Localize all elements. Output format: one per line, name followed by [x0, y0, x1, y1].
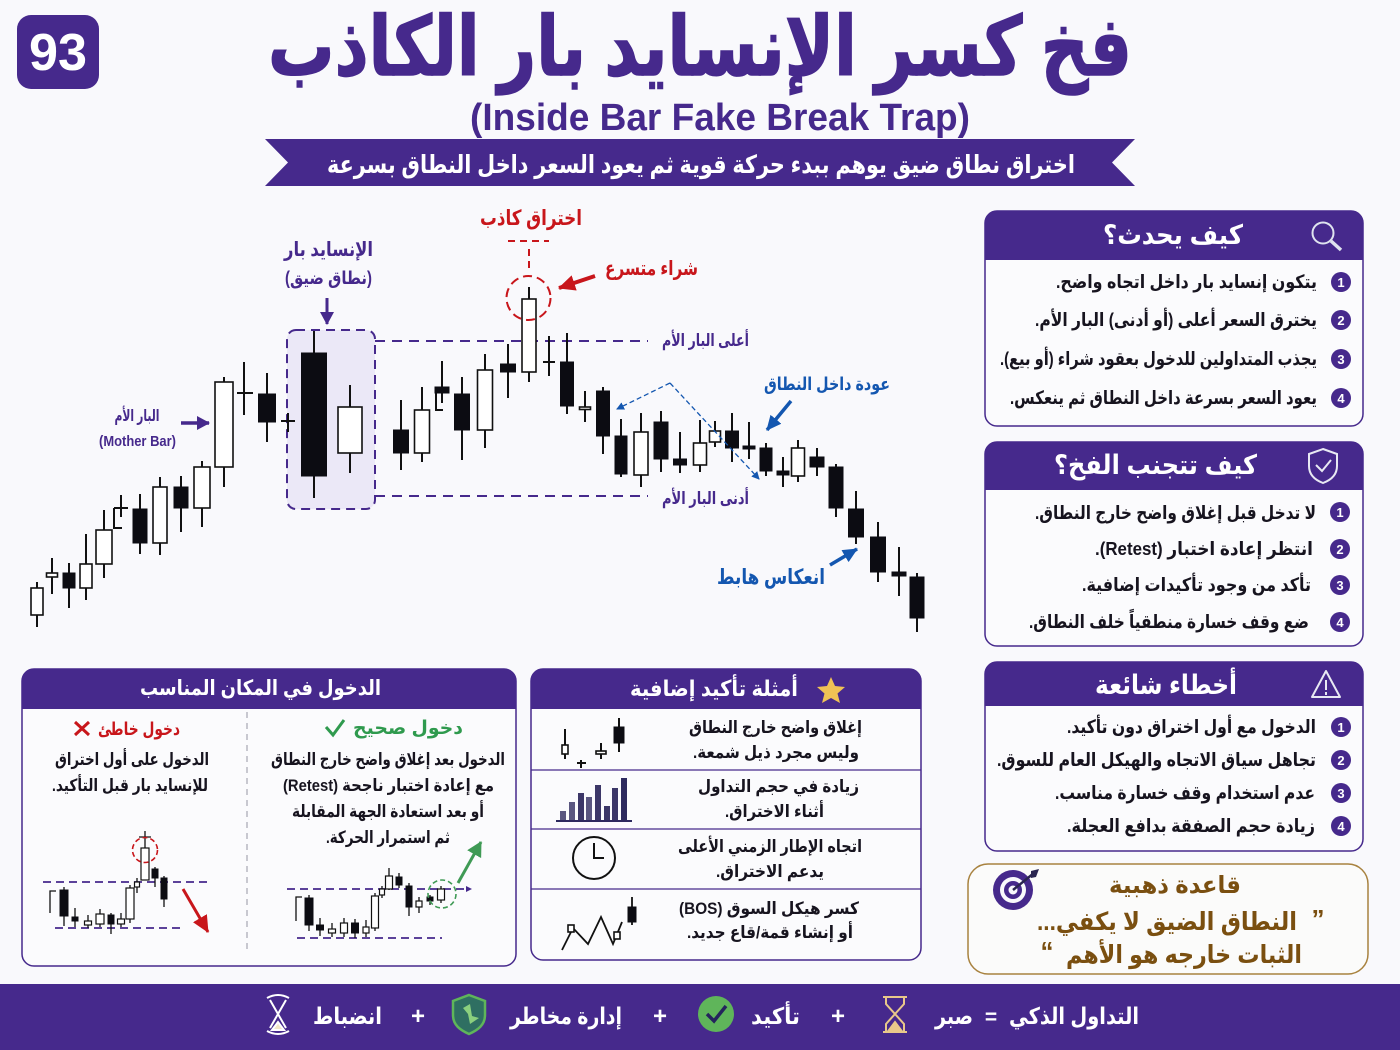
correct entry column: دخول صحيح: [353, 718, 463, 739]
mother bar high and low lines: [375, 341, 648, 496]
label: bearish reversal: انعكاس هابط: [717, 566, 825, 589]
icon: gold hourglass: [883, 997, 907, 1032]
panel: how to avoid the trap: [985, 442, 1363, 646]
row: higher timeframe trend: اتجاه الإطار الزمني الأعلى: [678, 836, 862, 857]
arrow: back inside range: [767, 401, 791, 430]
icon: star: [817, 677, 845, 703]
formula text: انضباط: [313, 1003, 382, 1029]
candle wicks: [37, 287, 917, 632]
heading: أمثلة تأكيد إضافية: [630, 673, 798, 702]
row: clear close outside range: [562, 718, 862, 768]
label: inside bar: (نطاق ضيق): [285, 268, 372, 289]
arrow: to inside bar: [326, 298, 328, 324]
formula text: صبر: [934, 1003, 973, 1030]
subtitle: (Inside Bar Fake Break Trap): [470, 97, 970, 139]
rule quote: “: [1040, 936, 1054, 966]
row: increased volume: أثناء الاختراق.: [725, 800, 824, 822]
list: ضع وقف خسارة منطقياً خلف النطاق.: [1029, 608, 1309, 633]
icon: target: [993, 869, 1039, 910]
list: [997, 715, 1351, 837]
hollow candles: [31, 299, 804, 615]
heading: كيف يحدث؟: [1103, 220, 1243, 250]
rule quote: الثبات خارجه هو الأهم: [1066, 939, 1302, 970]
list: 1: [1337, 720, 1345, 735]
arrow: bearish reversal: [830, 549, 857, 565]
wrong entry column: الدخول على أول اختراق: [55, 748, 209, 770]
list: انتظر إعادة اختبار (Retest).: [1095, 538, 1313, 560]
formula text: +: [411, 1003, 425, 1030]
icon: green shield: [453, 995, 485, 1034]
formula text: التداول الذكي: [1009, 1003, 1139, 1030]
heading: كيف تتجنب الفخ؟: [1054, 450, 1257, 481]
correct entry column: الدخول بعد إغلاق واضح خارج النطاق: [271, 750, 505, 770]
list: [1029, 502, 1350, 633]
label: mother bar high: أعلى البار الأم: [662, 329, 749, 350]
wrong entry column: دخول خاطئ: [98, 719, 180, 740]
heading: الدخول في المكان المناسب: [140, 677, 381, 700]
label: premature buying: شراء متسرع: [605, 258, 698, 280]
formula text: تأكيد: [751, 1000, 800, 1029]
formula text: [313, 1000, 1139, 1030]
row: break of structure: أو إنشاء قمة/قاع جديد.: [687, 921, 853, 943]
correct entry column: أو بعد استعادة الجهة المقابلة: [292, 800, 484, 822]
rule heading: قاعدة ذهبية: [1109, 872, 1241, 899]
list: 2: [1337, 313, 1345, 328]
list: يخترق السعر أعلى (أو أدنى) البار الأم.: [1035, 308, 1317, 331]
list: تجاهل سياق الاتجاه والهيكل العام للسوق.: [997, 749, 1316, 771]
icon: white hourglass: [267, 995, 289, 1034]
row: increased volume: [556, 777, 859, 822]
label: mother bar: (Mother Bar): [99, 434, 176, 450]
list: 3: [1336, 578, 1344, 593]
solid candles: [63, 353, 924, 618]
icon: magnifier: [1312, 222, 1341, 250]
label: back inside range: عودة داخل النطاق: [764, 374, 890, 395]
rule quote: ”: [1312, 904, 1324, 934]
row: higher timeframe trend: [573, 836, 862, 882]
list: 2: [1337, 753, 1345, 768]
list: الدخول مع أول اختراق دون تأكيد.: [1067, 715, 1316, 738]
wrong entry column: للإنسايد بار قبل التأكيد.: [52, 774, 208, 795]
arrow: premature buying: [559, 276, 595, 288]
row: clear close outside range: إغلاق واضح خارج النطاق: [689, 718, 862, 738]
false breakout dashed marker and circle: [506, 241, 550, 320]
row: break of structure: كسر هيكل السوق (BOS): [679, 899, 859, 919]
list: تأكد من وجود تأكيدات إضافية.: [1082, 573, 1311, 596]
list: 3: [1337, 352, 1345, 367]
inside bar highlighted range: [287, 330, 375, 509]
formula text: +: [831, 1003, 845, 1030]
mini chart: wrong entry: [43, 831, 212, 934]
row: higher timeframe trend: يدعم الاختراق.: [716, 862, 824, 882]
list: 1: [1337, 275, 1345, 290]
label: mother bar: البار الأم: [114, 406, 160, 425]
list: يتكون إنسايد بار داخل اتجاه واضح.: [1056, 271, 1317, 293]
ribbon subtitle banner: [265, 139, 1135, 186]
dashed projected path: [617, 383, 759, 479]
correct entry column: ثم استمرار الحركة.: [326, 828, 450, 848]
list: يعود السعر بسرعة داخل النطاق ثم ينعكس.: [1010, 387, 1317, 409]
arrow: to mother bar: [181, 421, 209, 425]
footer bar: [0, 984, 1400, 1050]
ribbon subtitle banner: اختراق نطاق ضيق يوهم ببدء حركة قوية ثم يعود السعر داخل النطاق بسرعة: [327, 151, 1075, 180]
title: فخ كسر الإنسايد بار الكاذب: [268, 2, 1132, 96]
panel: extra confirmation examples: [531, 669, 921, 960]
heading: أخطاء شائعة: [1095, 667, 1237, 700]
formula text: =: [985, 1006, 997, 1029]
list: [1000, 271, 1351, 409]
row: increased volume: زيادة في حجم التداول: [698, 777, 859, 797]
label: inside bar: الإنسايد بار: [283, 239, 373, 261]
list: 4: [1337, 819, 1345, 834]
icon: green check: [698, 996, 734, 1032]
panel: golden rule: [968, 864, 1368, 974]
panel: common mistakes: [985, 662, 1363, 851]
list: لا تدخل قبل إغلاق واضح خارج النطاق.: [1035, 502, 1316, 524]
badge: number 93: [17, 15, 99, 89]
label: false breakout: اختراق كاذب: [480, 207, 582, 230]
list: يجذب المتداولين للدخول بعقود شراء (أو بيع).: [1000, 347, 1317, 370]
list: 1: [1336, 505, 1344, 520]
main candlestick chart: [31, 287, 924, 632]
label: mother bar low: أدنى البار الأم: [662, 487, 749, 508]
mini chart: correct entry: [287, 842, 481, 938]
row: clear close outside range: وليس مجرد ذيل شمعة.: [693, 743, 859, 763]
formula text: +: [653, 1003, 667, 1030]
panel: how it happens: [985, 211, 1363, 426]
correct entry column: [271, 718, 505, 848]
formula text: إدارة مخاطر: [509, 1003, 622, 1030]
list: عدم استخدام وقف خسارة مناسب.: [1055, 782, 1315, 804]
icon: warning: [1312, 671, 1340, 697]
list: 2: [1336, 542, 1344, 557]
icon: shield: [1309, 449, 1337, 483]
rule quote: النطاق الضيق لا يكفي...: [1037, 908, 1297, 937]
row: break of structure: [562, 897, 859, 950]
label: mother bar: [99, 406, 176, 450]
correct entry column: مع إعادة اختبار ناجحة (Retest): [283, 776, 494, 796]
panel: enter in the right place: [22, 669, 516, 966]
list: زيادة حجم الصفقة بدافع العجلة.: [1067, 815, 1315, 837]
list: 3: [1337, 786, 1345, 801]
rule quote: [1037, 904, 1324, 970]
label: inside bar: [283, 239, 373, 289]
wrong entry column: [52, 719, 209, 795]
badge: number 93: 93: [29, 24, 87, 82]
list: 4: [1337, 391, 1345, 406]
list: 4: [1336, 615, 1344, 630]
